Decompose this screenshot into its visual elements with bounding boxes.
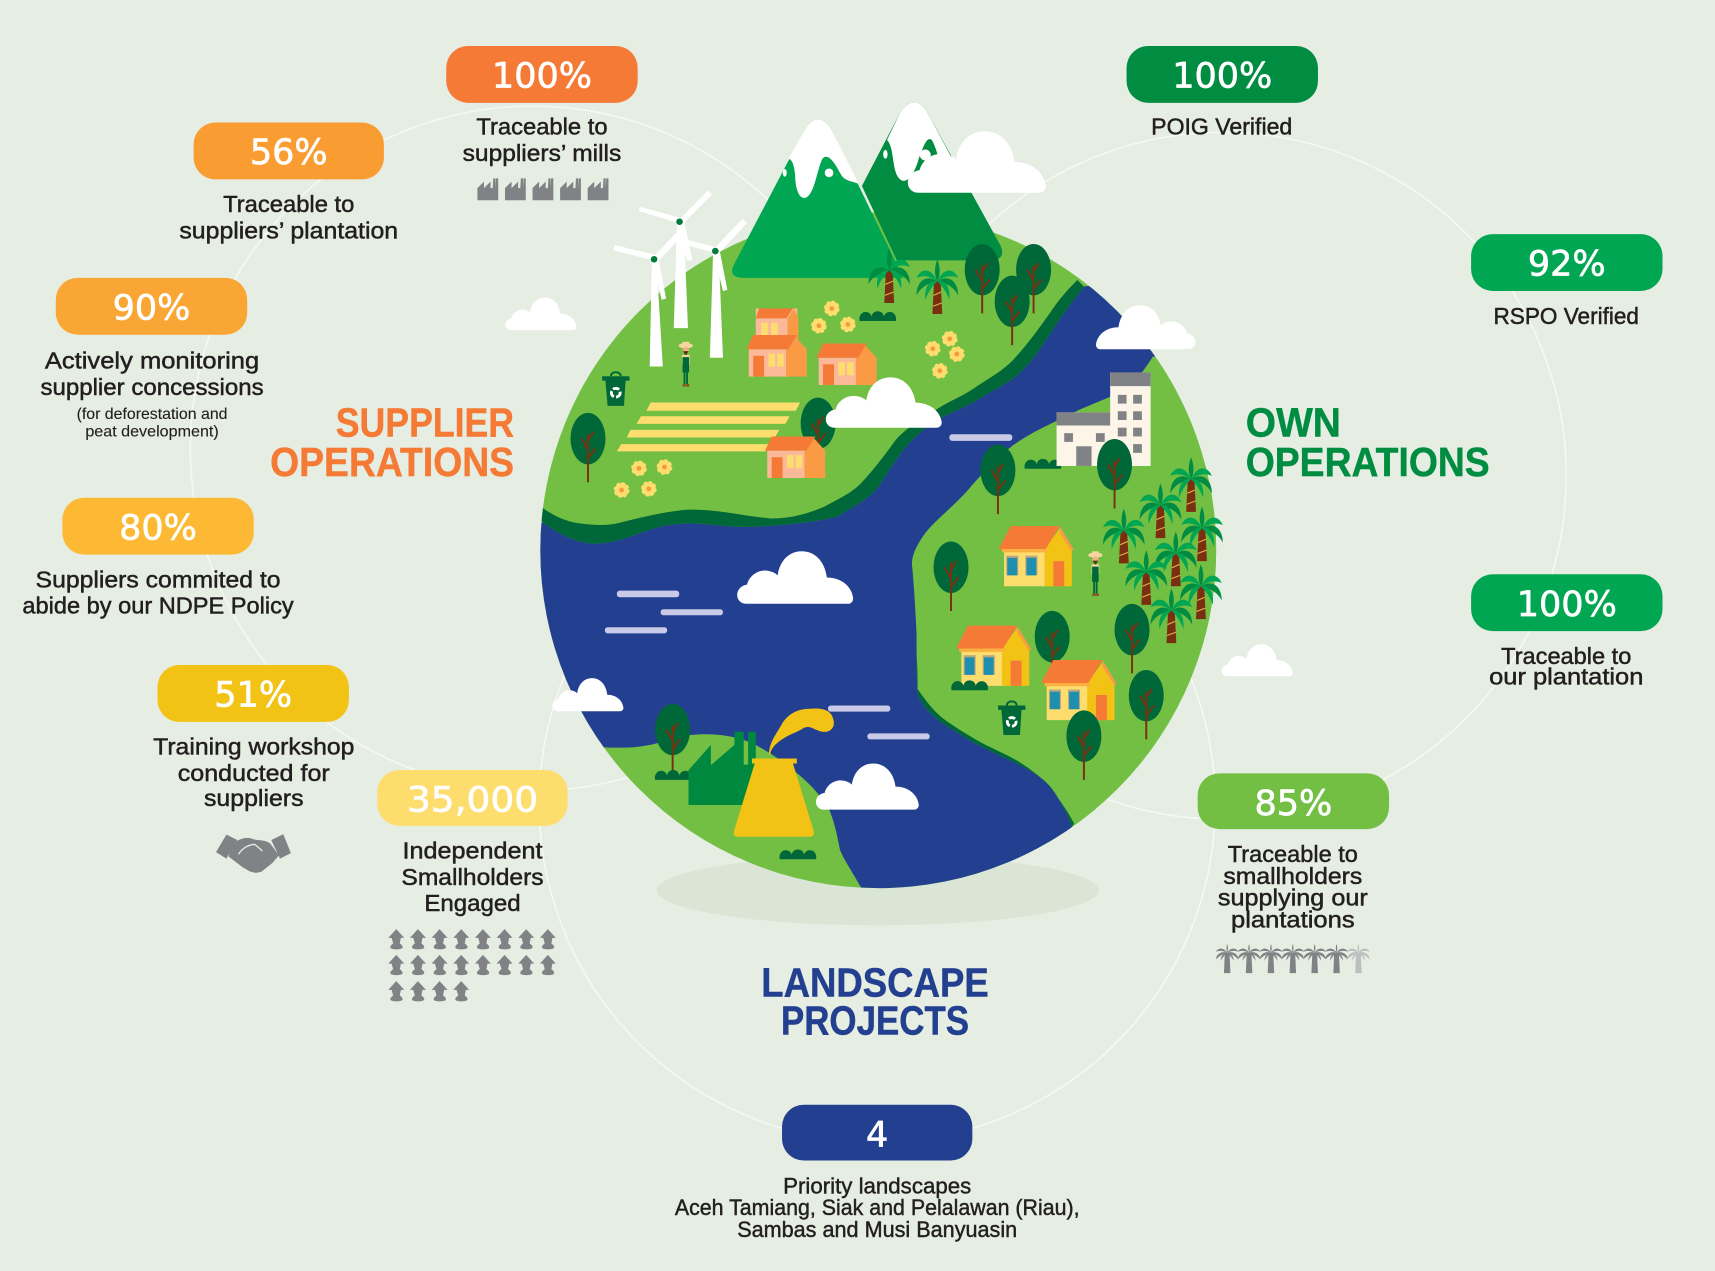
- stat: 100% traceable to mills: [446, 46, 638, 200]
- bush by yellow house: [951, 680, 988, 690]
- heading: own operations: [1246, 399, 1490, 485]
- foreground tree: [1066, 710, 1101, 780]
- icon: people grid: [388, 929, 556, 1001]
- stat: 80% NDPE policy: 80%: [119, 508, 197, 548]
- stat: 56% traceable to plantation: suppliers’ plantation: [179, 217, 398, 243]
- stat: 4 priority landscapes: Aceh Tamiang, Siak and Pelalawan (Riau),: [675, 1195, 1080, 1220]
- globe shadow: [657, 855, 1099, 925]
- stat: 92% RSPO: RSPO Verified: [1494, 303, 1639, 329]
- stat: 90% monitoring: 90%: [113, 288, 190, 328]
- stat: 80% NDPE policy: abide by our NDPE Policy: [22, 593, 294, 619]
- stat: 90% monitoring: peat development): [85, 423, 219, 440]
- farmer: [679, 342, 693, 387]
- stat: 56% traceable to plantation: [179, 123, 398, 243]
- recycle bin 2: [998, 701, 1025, 735]
- heading: own operations: OWN: [1246, 399, 1341, 445]
- trees: [570, 244, 1164, 773]
- stat: 80% NDPE policy: Suppliers commited to: [36, 566, 281, 592]
- stat: 100% traceable to our plantation: 100%: [1517, 585, 1617, 625]
- stat: 51% training: suppliers: [204, 785, 304, 811]
- stat: 100% traceable to our plantation: Traceable to: [1501, 643, 1631, 669]
- stat: 4 priority landscapes: [675, 1105, 1080, 1242]
- stat: 51% training: 51%: [214, 676, 292, 716]
- stat: 85% smallholders traceable: 85%: [1254, 784, 1332, 824]
- clouds: [505, 131, 1293, 810]
- connector rings: [190, 106, 1566, 1142]
- green factory: [689, 732, 756, 805]
- stat: 35,000 smallholders: 35,000: [407, 781, 538, 821]
- stat: 51% training: conducted for: [178, 760, 330, 786]
- stat: 51% training: [153, 665, 354, 873]
- stat: 100% POIG: POIG Verified: [1151, 114, 1292, 140]
- heading: landscape projects: PROJECTS: [781, 998, 969, 1044]
- heading: supplier operations: OPERATIONS: [270, 439, 514, 485]
- stat: 90% monitoring: (for deforestation and: [77, 406, 228, 423]
- stat: 90% monitoring: [40, 278, 264, 440]
- icon: palms: [1216, 944, 1370, 973]
- stat: 85% smallholders traceable: plantations: [1231, 907, 1355, 933]
- land base: [540, 212, 1216, 888]
- upper river bank: [536, 280, 1084, 544]
- icon: handshake: [216, 834, 291, 873]
- lower river bank: [917, 656, 1074, 827]
- wind turbines: [614, 190, 747, 366]
- stat: 85% smallholders traceable: [1198, 773, 1389, 973]
- stat: 90% monitoring: Actively monitoring: [45, 348, 259, 374]
- stat: 100% POIG: 100%: [1172, 57, 1272, 97]
- stat: 4 priority landscapes: Priority landscapes: [783, 1173, 971, 1198]
- yellow houses: [956, 526, 1117, 720]
- bushes: [655, 311, 1061, 859]
- stat: 100% POIG: [1127, 46, 1318, 140]
- stat: 90% monitoring: supplier concessions: [40, 374, 264, 400]
- icon: factories: [477, 178, 608, 200]
- flowers: [615, 301, 964, 497]
- smoke: [769, 708, 834, 755]
- tree by building: [1097, 439, 1132, 508]
- mountains: [732, 102, 1002, 278]
- stat: 92% RSPO: 92%: [1528, 245, 1606, 285]
- stat: 100% traceable to mills: suppliers’ mills: [463, 140, 621, 166]
- farmer 2: [1088, 551, 1102, 596]
- stat: 100% traceable to mills: Traceable to: [476, 114, 608, 140]
- stat: 100% traceable to mills: 100%: [492, 57, 592, 97]
- stat: 35,000 smallholders: Engaged: [424, 890, 521, 916]
- stat: 100% traceable to our plantation: our plantation: [1489, 664, 1643, 690]
- globe illustration: [514, 102, 1223, 919]
- stat: 80% NDPE policy: [22, 498, 294, 619]
- stat: 35,000 smallholders: Smallholders: [401, 864, 544, 890]
- palms: [868, 248, 1223, 643]
- yellow flask chimney: [734, 759, 814, 837]
- stat: 85% smallholders traceable: Traceable to: [1228, 841, 1358, 867]
- stat: 51% training: Training workshop: [153, 734, 354, 760]
- stat: 85% smallholders traceable: supplying our: [1218, 885, 1368, 911]
- crop field: [617, 403, 800, 451]
- heading: landscape projects: [761, 959, 989, 1044]
- stat: 4 priority landscapes: 4: [866, 1115, 888, 1155]
- stat: 4 priority landscapes: Sambas and Musi Banyuasin: [737, 1217, 1017, 1242]
- stat: 56% traceable to plantation: 56%: [250, 133, 328, 173]
- stat: 92% RSPO: [1471, 234, 1662, 329]
- stat: 35,000 smallholders: Independent: [402, 838, 543, 864]
- heading: landscape projects: LANDSCAPE: [761, 959, 989, 1005]
- heading: own operations: OPERATIONS: [1246, 439, 1490, 485]
- stat: 56% traceable to plantation: Traceable to: [223, 191, 354, 217]
- heading: supplier operations: SUPPLIER: [336, 399, 514, 445]
- orange houses: [747, 308, 877, 478]
- stat: 100% traceable to our plantation: [1471, 574, 1662, 690]
- buildings: [1057, 372, 1151, 466]
- stat: 35,000 smallholders: [377, 770, 568, 1001]
- stat: 85% smallholders traceable: smallholders: [1223, 863, 1362, 889]
- heading: supplier operations: [270, 399, 514, 485]
- recycle bin: [602, 372, 629, 406]
- river and sea: [540, 286, 1156, 888]
- river wave bars: [605, 434, 1012, 739]
